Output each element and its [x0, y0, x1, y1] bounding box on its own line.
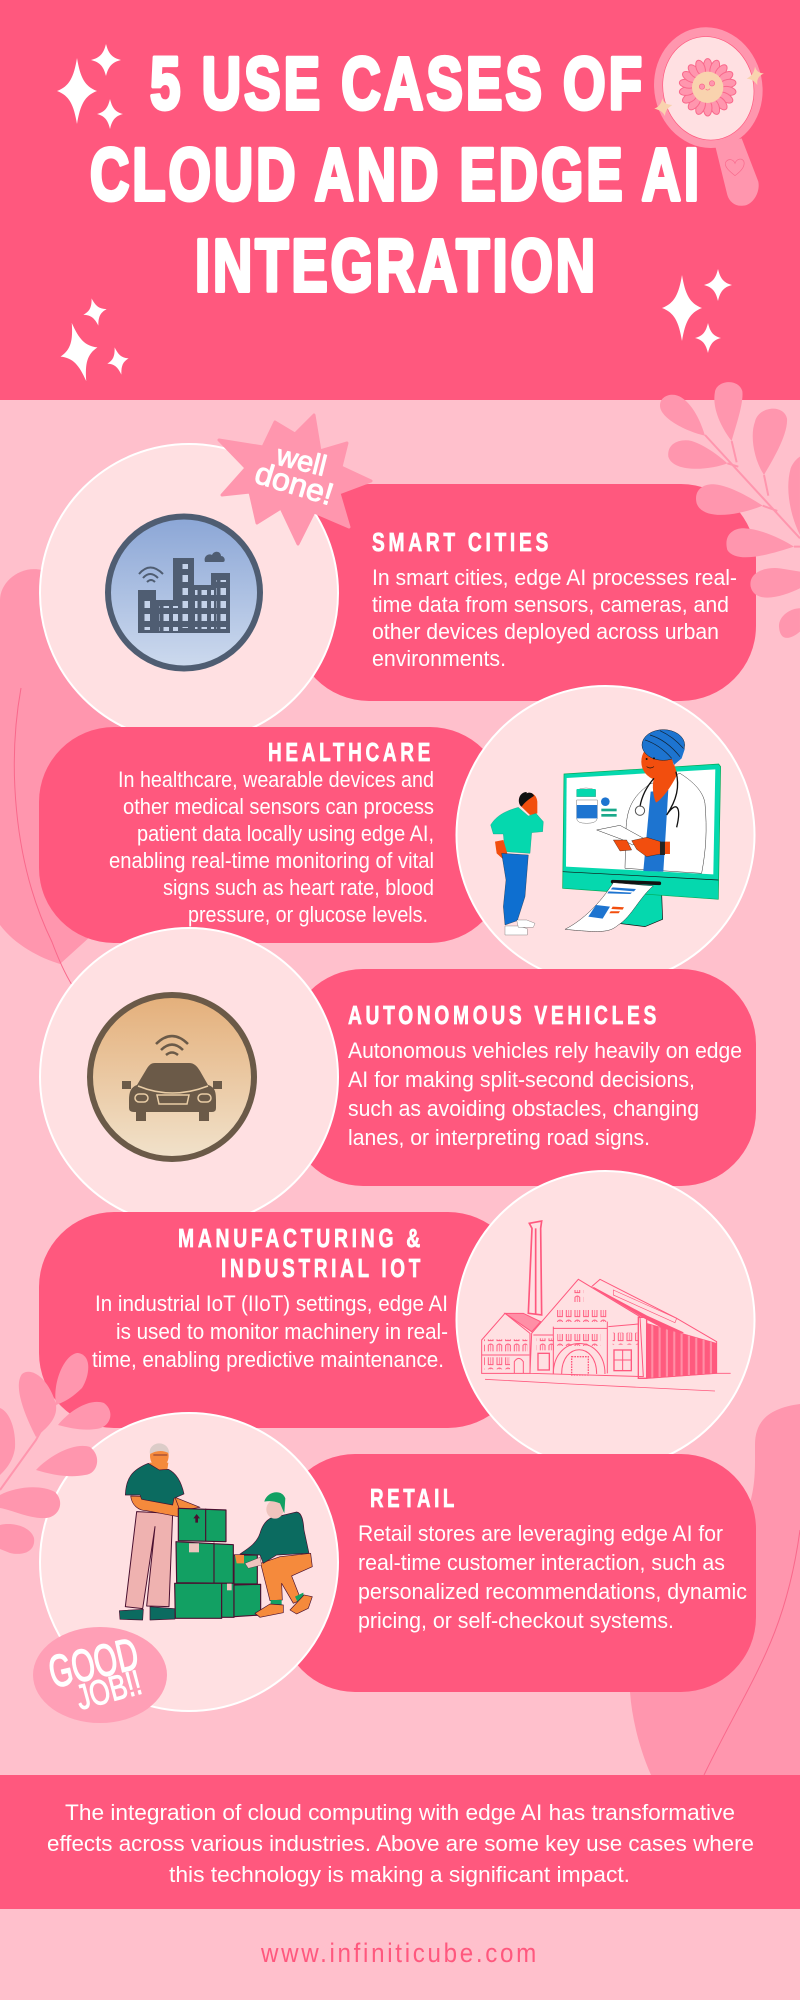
body text: smart cities: other devices deployed across urban — [372, 619, 719, 644]
panel: healthcare — [39, 727, 505, 943]
decorative leaves: bottom left — [0, 1353, 110, 1554]
body text: retail: Retail stores are leveraging edge AI for — [358, 1521, 723, 1546]
heading: autonomous vehicles: AUTONOMOUS VEHICLES — [348, 1000, 660, 1030]
conclusion text: The integration of cloud computing with edge AI has transformative — [65, 1800, 735, 1825]
circle: retail — [40, 1413, 338, 1711]
panel: retail — [280, 1454, 756, 1692]
decorative leaves: top right — [660, 382, 800, 638]
panel: manufacturing and industrial IoT — [39, 1212, 523, 1428]
heading: manufacturing and industrial IoT: MANUFACTURING & — [178, 1223, 424, 1253]
heading: manufacturing and industrial IoT — [178, 1223, 424, 1283]
circle: manufacturing — [456, 1171, 754, 1469]
icon: hand mirror with flower — [643, 17, 774, 206]
sparkles: bottom right — [662, 269, 732, 353]
body text: autonomous vehicles: lanes, or interpreting road signs. — [348, 1125, 650, 1150]
body text: retail — [358, 1521, 747, 1633]
body text: retail: personalized recommendations, dynamic — [358, 1579, 747, 1604]
body text: autonomous vehicles — [348, 1038, 742, 1150]
circle: healthcare — [456, 686, 754, 984]
body text: autonomous vehicles: such as avoiding obstacles, changing — [348, 1096, 699, 1121]
body text: smart cities: time data from sensors, cameras, and — [372, 592, 729, 617]
circle: smart cities — [40, 444, 338, 742]
decorative blob: left — [0, 569, 130, 985]
badge: well done — [219, 415, 371, 544]
conclusion text: effects across various industries. Above are some key use cases where — [47, 1831, 754, 1856]
sparkles: top left — [57, 44, 123, 129]
body text: smart cities — [372, 565, 737, 671]
illustration: workers stacking boxes — [119, 1443, 312, 1620]
body text: manufacturing and industrial IoT: In industrial IoT (IIoT) settings, edge AI — [95, 1291, 448, 1316]
body text: autonomous vehicles: Autonomous vehicles rely heavily on edge — [348, 1038, 742, 1063]
conclusion text: this technology is making a significant impact. — [169, 1862, 630, 1887]
badge text: good: GOOD — [44, 1628, 143, 1698]
body text: manufacturing and industrial IoT: is used to monitor machinery in real- — [116, 1319, 448, 1344]
illustration: factory sketch — [482, 1221, 731, 1391]
badge text: done: done! — [251, 455, 338, 512]
body text: manufacturing and industrial IoT: time, enabling predictive maintenance. — [92, 1347, 444, 1372]
title — [90, 42, 702, 307]
circle: autonomous vehicles — [40, 928, 338, 1226]
body text: smart cities: In smart cities, edge AI processes real- — [372, 565, 737, 590]
title: 5 USE CASES OF — [150, 42, 645, 125]
heading: smart cities: SMART CITIES — [372, 527, 552, 557]
panel: autonomous vehicles — [288, 969, 756, 1186]
body text: healthcare: pressure, or glucose levels. — [188, 902, 428, 927]
footer band — [0, 1775, 800, 1909]
heading: manufacturing and industrial IoT: INDUSTRIAL IOT — [221, 1253, 424, 1283]
illustration: doctor on monitor and patient — [491, 730, 721, 935]
title: INTEGRATION — [195, 224, 598, 307]
panel: smart cities — [294, 484, 756, 701]
heading: retail: RETAIL — [370, 1483, 458, 1513]
body text: healthcare: enabling real-time monitoring of vital — [109, 848, 434, 873]
badge: good job — [33, 1627, 167, 1723]
website url: www.infiniticube.com — [260, 1938, 539, 1968]
conclusion text — [47, 1800, 754, 1887]
sparkles: bottom left — [53, 296, 132, 386]
body text: healthcare: other medical sensors can process — [123, 794, 434, 819]
icon: connected car medallion — [90, 995, 254, 1159]
body text: retail: pricing, or self-checkout systems. — [358, 1608, 674, 1633]
heading: healthcare: HEALTHCARE — [268, 737, 434, 767]
body text: smart cities: environments. — [372, 646, 506, 671]
body text: manufacturing and industrial IoT — [92, 1291, 448, 1372]
body text: healthcare: In healthcare, wearable devices and — [118, 767, 434, 792]
icon: smart city medallion — [108, 516, 260, 668]
badge text: job: JOB!! — [72, 1663, 146, 1718]
body text: healthcare: signs such as heart rate, blood — [163, 875, 434, 900]
body text: retail: real-time customer interaction, such as — [358, 1550, 725, 1575]
body text: healthcare — [109, 767, 434, 927]
header band — [0, 0, 800, 400]
body text: autonomous vehicles: AI for making split-second decisions, — [348, 1067, 695, 1092]
body text: healthcare: patient data locally using edge AI, — [137, 821, 434, 846]
decorative blob: bottom right — [630, 1404, 800, 1775]
badge text: well: well — [272, 440, 330, 483]
